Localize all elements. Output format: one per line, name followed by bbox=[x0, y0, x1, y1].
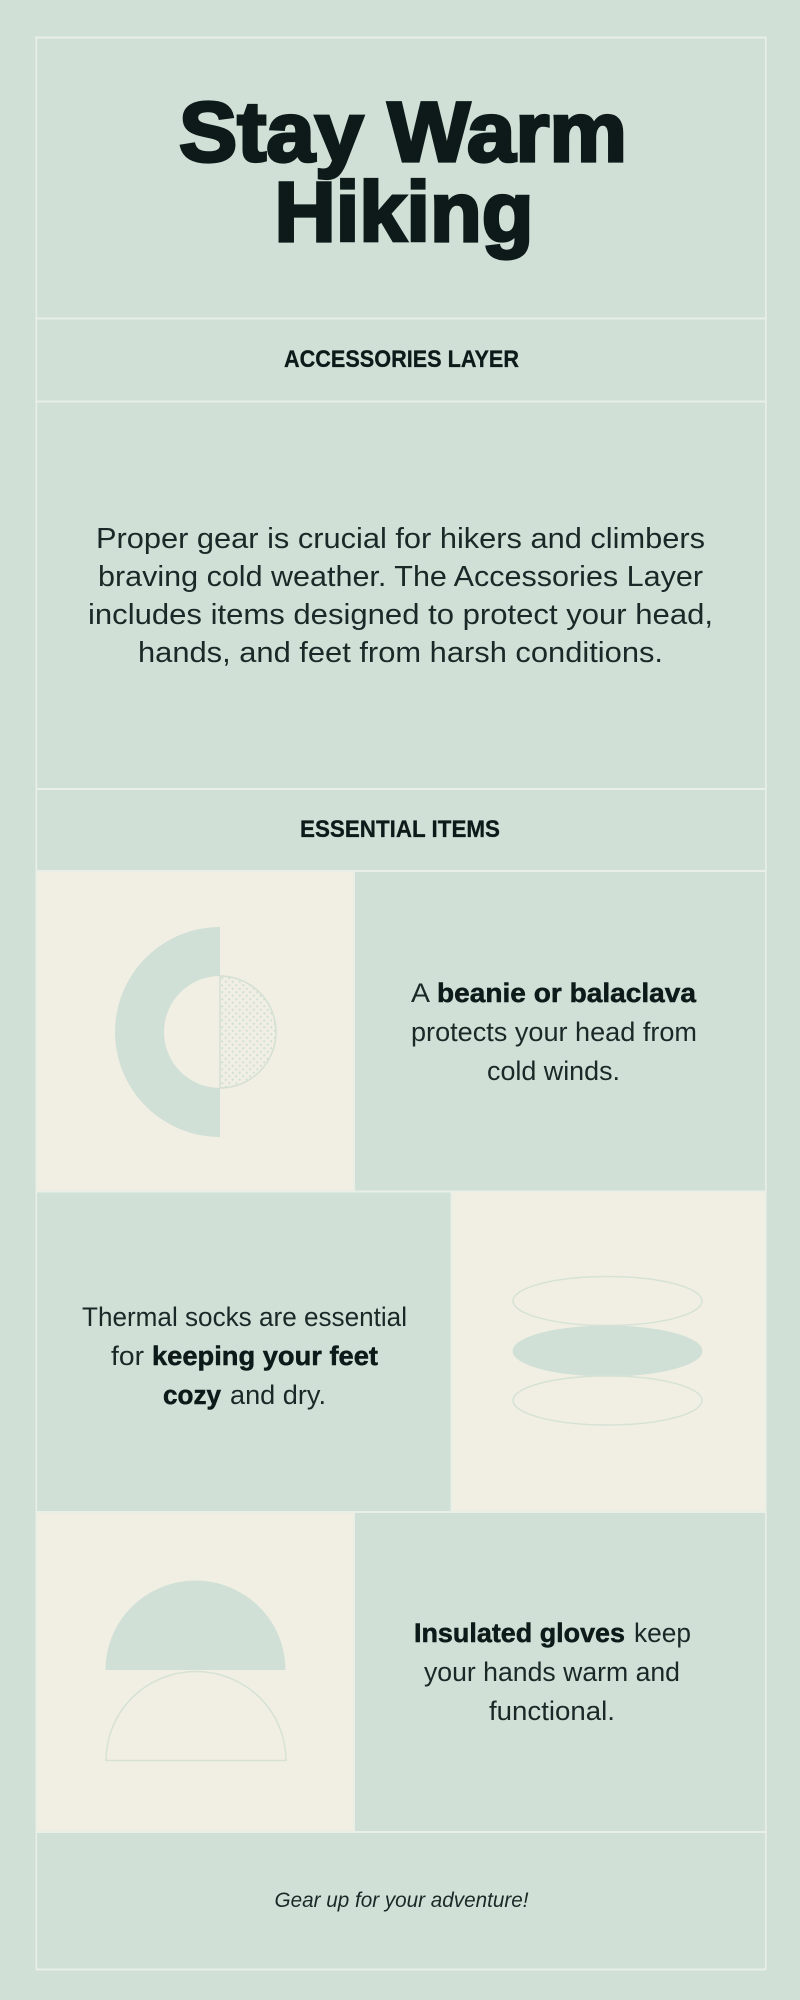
text: beanie or balaclava: beanie or balaclava bbox=[437, 978, 696, 1008]
panel: beanie item bbox=[37, 871, 697, 1192]
icon panel: beanie bbox=[37, 871, 353, 1192]
text: insulated gloves: Insulated gloves bbox=[414, 1618, 625, 1648]
text: beanie or balaclava: cold winds. bbox=[487, 1056, 620, 1086]
text: insulated gloves: functional. bbox=[489, 1696, 615, 1726]
text: insulated gloves bbox=[414, 1618, 691, 1726]
icon panel: gloves bbox=[37, 1512, 353, 1832]
text: thermal socks: cozy bbox=[163, 1380, 221, 1410]
text block: introduction: Proper gear is crucial for hikers and climbers bbox=[96, 523, 705, 555]
text: thermal socks: and dry. bbox=[230, 1380, 326, 1410]
panel: title bbox=[179, 85, 627, 259]
text block: introduction bbox=[88, 523, 713, 669]
heading: essential items: ESSENTIAL ITEMS bbox=[300, 816, 500, 843]
text: thermal socks: Thermal socks are essential bbox=[82, 1302, 407, 1332]
text: beanie or balaclava bbox=[411, 978, 697, 1086]
text: thermal socks: for bbox=[111, 1341, 144, 1371]
text block: introduction: includes items designed to protect your head, bbox=[88, 599, 713, 631]
text: beanie or balaclava: A bbox=[411, 978, 430, 1008]
icon panel: socks bbox=[452, 1191, 765, 1512]
icon: stacked ellipses bbox=[512, 1276, 702, 1425]
title: Hiking bbox=[274, 165, 534, 259]
title: Stay Warm bbox=[179, 85, 627, 179]
footer text: Gear up for your adventure! bbox=[274, 1889, 529, 1912]
icon: half ring with dotted half circle bbox=[115, 927, 276, 1137]
text: thermal socks bbox=[82, 1302, 407, 1410]
panel: socks item bbox=[82, 1191, 765, 1512]
heading: accessories layer: ACCESSORIES LAYER bbox=[284, 346, 519, 373]
text: insulated gloves: your hands warm and bbox=[424, 1657, 680, 1687]
text: thermal socks: keeping your feet bbox=[152, 1341, 378, 1371]
text block: introduction: braving cold weather. The Accessories Layer bbox=[98, 561, 703, 593]
title bbox=[179, 85, 627, 259]
text block: introduction: hands, and feet from harsh conditions. bbox=[138, 637, 663, 669]
text: insulated gloves: keep bbox=[634, 1618, 691, 1648]
text: beanie or balaclava: protects your head from bbox=[411, 1017, 697, 1047]
panel: gloves item bbox=[37, 1512, 691, 1832]
icon: stacked half circles bbox=[106, 1580, 286, 1760]
